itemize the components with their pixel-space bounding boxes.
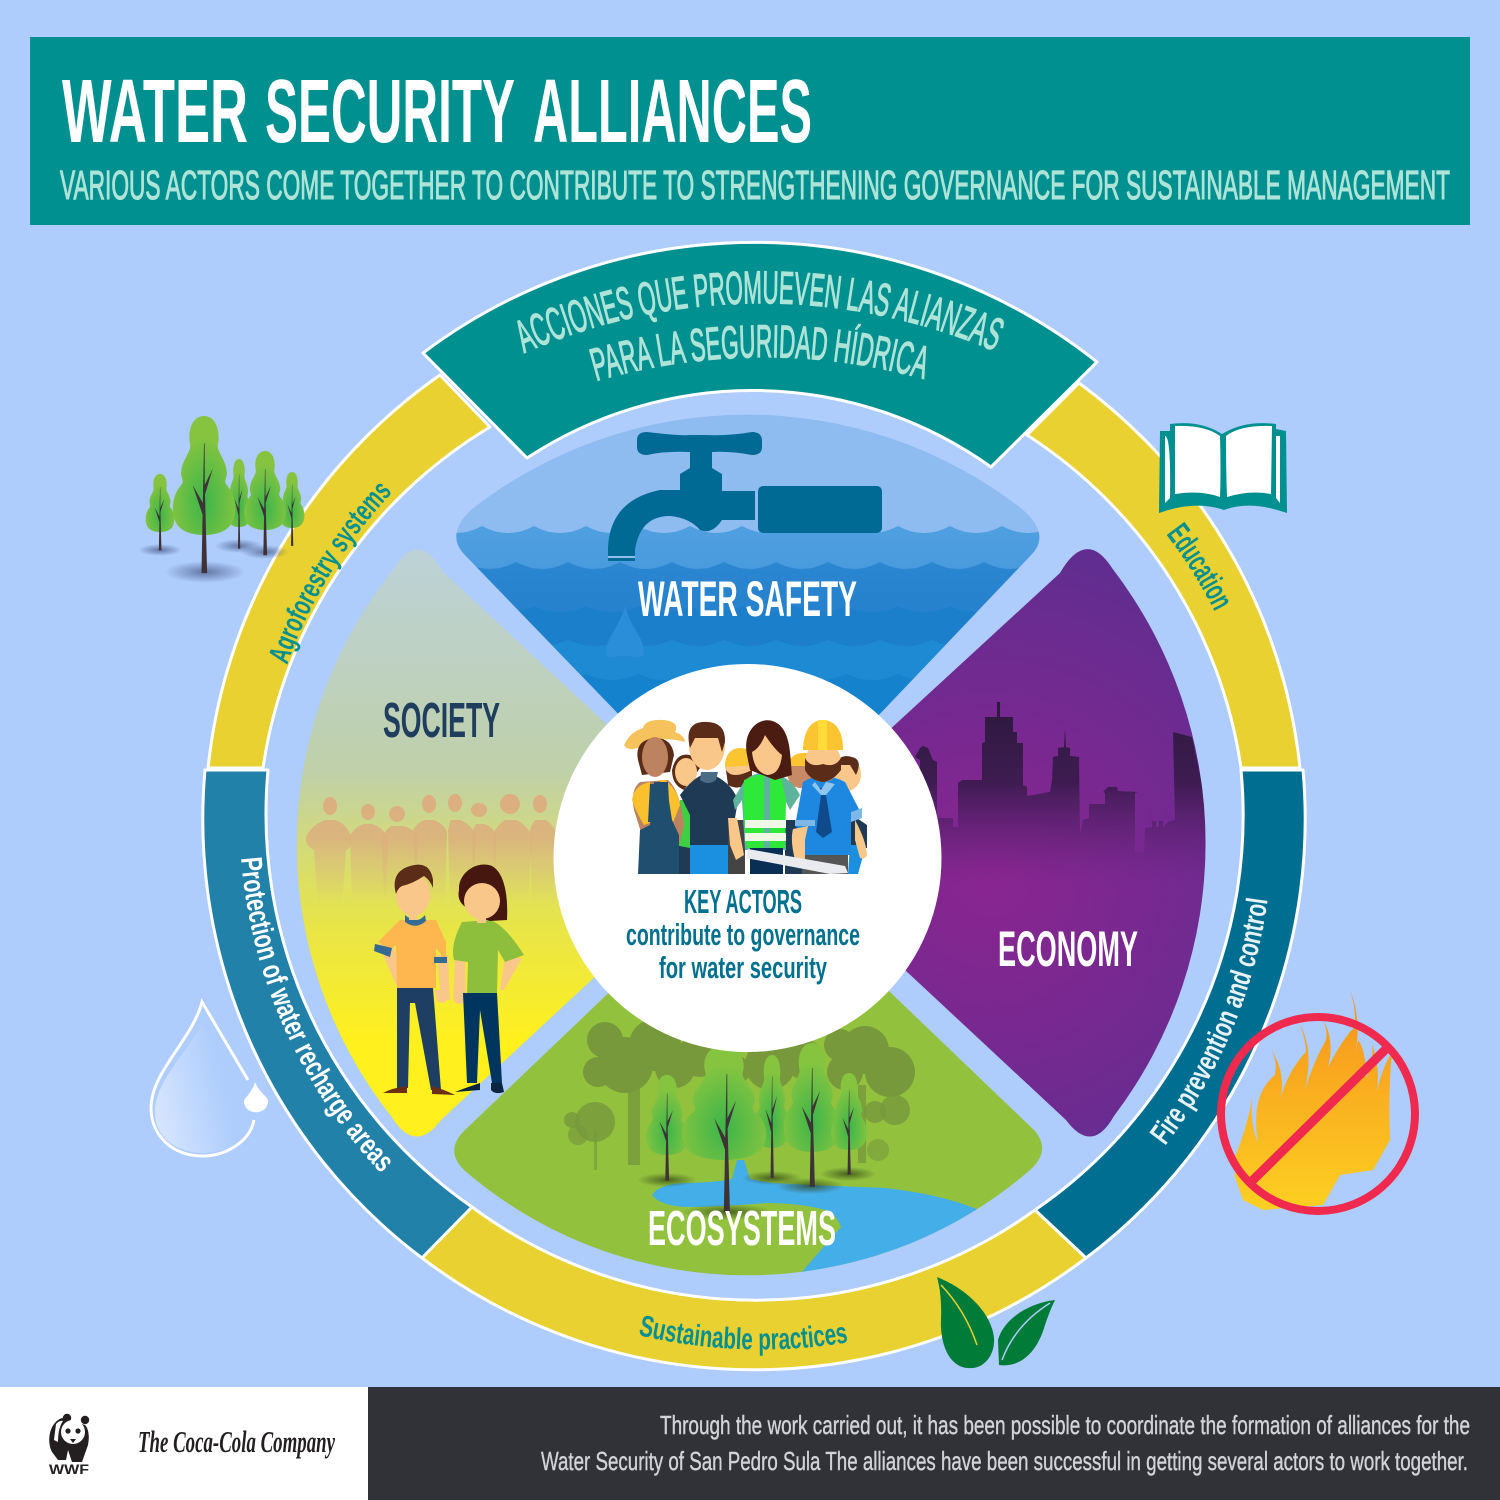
icon: open book <box>1159 423 1287 513</box>
farmer <box>624 720 685 874</box>
quadrant: ecosystems <box>454 991 1042 1276</box>
footer: text panel <box>368 1387 1500 1500</box>
title: SECURITY <box>265 62 515 162</box>
rolled plan <box>746 849 848 874</box>
pond <box>652 1160 977 1272</box>
label: agroforestry systems: Agroforestry systems <box>270 484 390 664</box>
foreground trees <box>646 1043 867 1212</box>
heading: society: SOCIETY <box>383 694 500 748</box>
footer: logos panel <box>0 1387 368 1500</box>
icon: leaves <box>937 1277 1055 1368</box>
title: ALLIANCES <box>533 62 812 162</box>
outer ring <box>203 375 1305 1370</box>
ring segment: sustainable practices <box>422 1207 1086 1370</box>
banner text line 2: PARA LA SEGURIDAD HÍDRICA <box>588 324 926 382</box>
man in navy shirt <box>680 722 744 874</box>
people illustration <box>624 720 867 874</box>
couple <box>374 864 524 1095</box>
quadrant: water safety <box>456 414 1040 716</box>
woman in safety vest <box>733 720 800 874</box>
logo: The Coca-Cola Company: The Coca-Cola Company <box>138 1424 335 1459</box>
title: WATER <box>62 62 248 162</box>
ring segment: protection of water recharge areas <box>203 770 472 1258</box>
key actors line 1: contribute to governance <box>626 917 860 952</box>
ring segment: education <box>1027 383 1300 768</box>
label: fire prevention: Fire prevention and control <box>1149 898 1268 1145</box>
woman <box>453 864 524 1093</box>
icon: water droplet <box>151 1002 268 1156</box>
centre circle: key actors <box>554 664 942 1052</box>
logo text: WWF: WWF <box>49 1461 90 1477</box>
icon: faucet <box>608 432 882 561</box>
right back man <box>833 756 867 874</box>
heading: water safety: WATER SAFETY <box>638 571 857 627</box>
label: education: Education <box>1166 522 1228 611</box>
icon: water drop <box>606 606 644 657</box>
heading: ecosystems: ECOSYSTEMS <box>648 1202 836 1256</box>
icon: agroforestry trees <box>138 416 304 583</box>
ring segment: fire prevention and control <box>1035 770 1305 1258</box>
quadrant: economy <box>892 549 1206 1136</box>
icon: no fire <box>1221 990 1415 1211</box>
heading: economy: ECONOMY <box>998 921 1138 977</box>
skyline silhouette <box>915 702 1206 864</box>
background forest silhouettes <box>564 1019 915 1170</box>
quadrant: society <box>296 549 607 1136</box>
label: protection: Protection of water recharge areas <box>241 858 391 1172</box>
engineer <box>792 720 862 874</box>
label: sustainable practices: Sustainable practices <box>640 1316 847 1356</box>
man <box>374 865 455 1095</box>
back left woman <box>672 755 700 874</box>
title <box>62 62 812 162</box>
banner text line 1: ACCIONES QUE PROMUEVEN LAS ALIANZAS <box>517 270 1004 354</box>
crowd silhouettes <box>306 794 556 905</box>
key actors line 2: for water security <box>659 950 827 985</box>
top banner: acciones <box>422 240 1098 468</box>
ring segment: agroforestry systems <box>208 375 490 768</box>
back right worker <box>785 753 815 874</box>
key actors heading: KEY ACTORS <box>684 883 802 920</box>
ring labels <box>241 484 1268 1356</box>
logo: WWF panda <box>49 1414 90 1477</box>
water waves <box>456 526 1040 716</box>
tree shadows <box>637 1167 876 1220</box>
header banner <box>30 37 1470 225</box>
back helmet man <box>725 748 752 874</box>
